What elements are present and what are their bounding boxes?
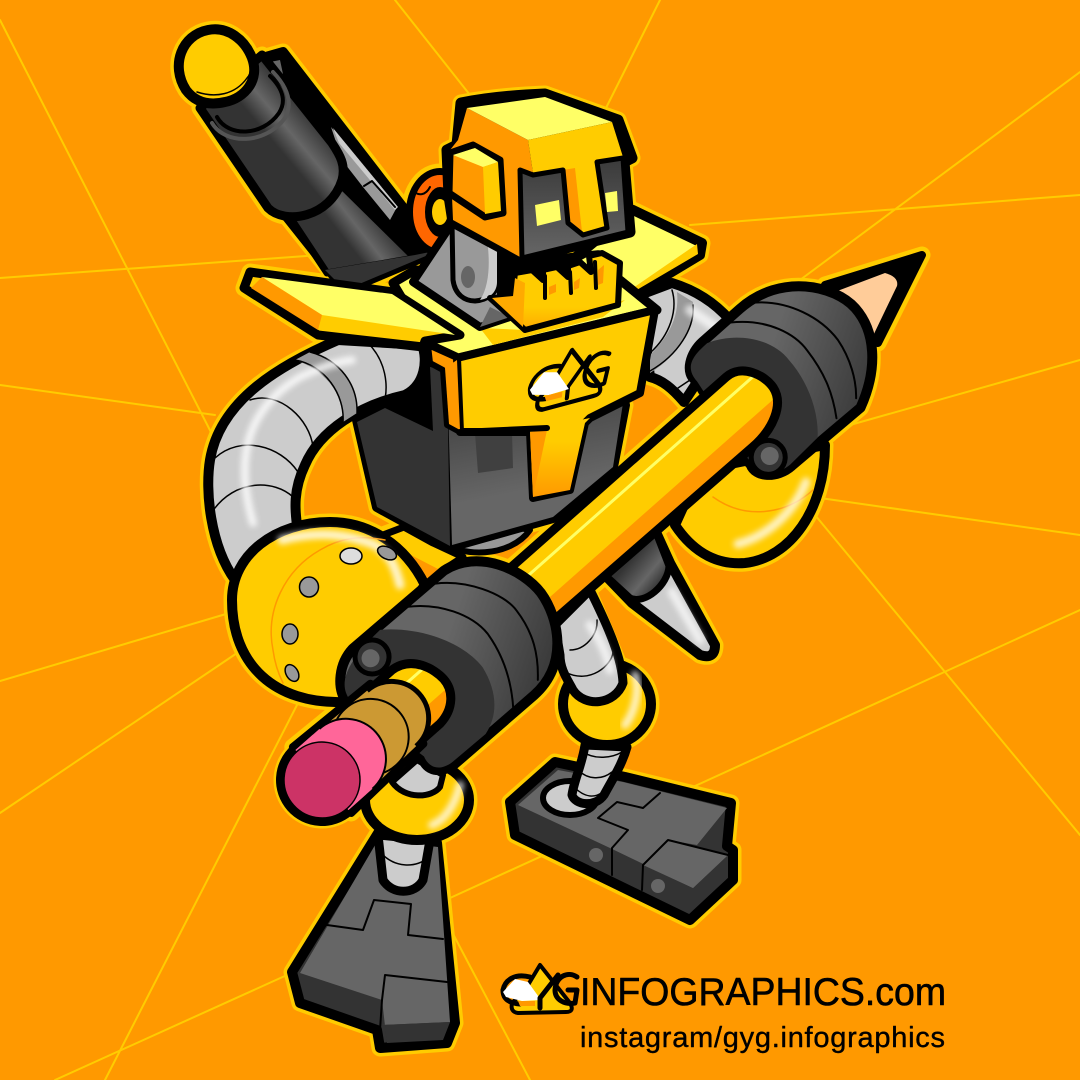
seam xyxy=(713,490,813,512)
hinge bolt xyxy=(461,266,475,288)
thin barrel xyxy=(290,187,415,273)
visor stem shade xyxy=(563,168,582,232)
head xyxy=(447,94,632,297)
head shadow on plate xyxy=(480,300,625,345)
chest top plate xyxy=(393,270,657,358)
tooth shades xyxy=(549,265,604,295)
orange ring xyxy=(406,168,474,256)
face plate xyxy=(520,158,628,258)
barrel grooves xyxy=(212,72,289,139)
right eye xyxy=(605,191,618,212)
body front face xyxy=(447,370,623,545)
left eye xyxy=(535,200,561,226)
instagram text: instagram/gyg.infographics xyxy=(580,1022,945,1054)
seam xyxy=(271,538,385,683)
pen clip plate xyxy=(210,52,440,290)
pen behind the robot xyxy=(179,29,440,290)
left foot xyxy=(292,830,455,1048)
body inset xyxy=(475,433,513,473)
eraser end face xyxy=(268,726,376,834)
jaw left shade xyxy=(492,278,525,327)
under-jaw shadow xyxy=(497,250,600,297)
stem shade xyxy=(530,430,547,497)
chest front xyxy=(457,310,655,498)
shin rings xyxy=(574,752,622,796)
ankle socket xyxy=(543,781,597,815)
right foot xyxy=(510,762,733,920)
plate corner xyxy=(265,60,283,74)
grip end face xyxy=(328,595,517,786)
footer logo xyxy=(503,965,577,1013)
chest side xyxy=(428,345,460,432)
foot seams xyxy=(598,793,728,890)
thigh rings xyxy=(565,620,613,676)
helmet front xyxy=(528,122,623,233)
right shin xyxy=(572,745,627,804)
highlight xyxy=(432,785,460,825)
ferrule xyxy=(316,665,445,791)
left knee ball xyxy=(365,760,469,840)
lower grip bolt xyxy=(348,633,396,681)
right forearm ball xyxy=(675,445,825,563)
right thigh tube xyxy=(555,590,623,702)
chest lower edge line xyxy=(460,428,547,432)
highlight xyxy=(282,535,400,585)
robot body xyxy=(357,365,625,547)
wing side xyxy=(251,277,322,330)
left shin xyxy=(378,835,430,891)
grip rings xyxy=(730,277,876,429)
lower grip xyxy=(323,531,589,791)
helmet side xyxy=(450,108,533,257)
hinge side xyxy=(480,240,497,300)
helmet top xyxy=(467,97,612,140)
arm band xyxy=(295,352,357,422)
rivets xyxy=(282,543,399,684)
hinge xyxy=(452,222,497,301)
spike joint xyxy=(605,530,669,599)
chest left shade xyxy=(445,360,460,430)
highlight xyxy=(738,482,806,544)
highlight xyxy=(625,675,637,725)
grip end face xyxy=(673,310,841,483)
pen cap edge xyxy=(197,53,251,95)
grey disc below body xyxy=(440,520,530,552)
upper grip xyxy=(668,251,907,488)
website text: INFOGRAPHICS.com xyxy=(580,971,946,1014)
right wing xyxy=(560,210,702,297)
left arm tube xyxy=(208,340,425,580)
arm band xyxy=(650,292,693,373)
arm rings xyxy=(212,343,386,512)
wood cone xyxy=(832,273,897,338)
foot top block xyxy=(643,840,728,888)
yellow pen cap xyxy=(179,29,254,103)
rear spike xyxy=(605,530,715,656)
yellow halo around the robot silhouette xyxy=(179,29,922,1048)
thigh highlight xyxy=(590,625,610,670)
left shoulder ball xyxy=(232,522,425,702)
pelvis shade xyxy=(407,553,440,582)
ear block xyxy=(449,145,503,217)
foot top face xyxy=(300,840,450,1025)
right wing edge xyxy=(630,244,698,294)
neck xyxy=(413,222,520,327)
pink eraser band xyxy=(295,729,372,810)
tooth gaps xyxy=(545,262,596,298)
foot sole shade xyxy=(382,1000,450,1043)
left thigh tube xyxy=(392,760,443,795)
neck inner xyxy=(480,307,510,327)
foot top face xyxy=(518,770,728,888)
foot seams xyxy=(327,900,447,1030)
pelvis yellow piece xyxy=(383,527,463,583)
body left face xyxy=(357,367,450,546)
arm highlight xyxy=(690,310,720,330)
chest armour xyxy=(428,310,655,498)
pencil tip xyxy=(825,255,922,343)
spike highlight xyxy=(672,592,700,640)
chest logo xyxy=(527,340,611,413)
upper grip bolt xyxy=(744,433,792,481)
pencil shaft xyxy=(508,366,782,616)
right knee ball xyxy=(563,663,651,745)
foot bolts xyxy=(589,848,665,893)
metal clip xyxy=(331,127,398,220)
chest stem gradient xyxy=(530,418,590,497)
wing top xyxy=(262,277,455,335)
arm highlight xyxy=(245,360,352,523)
left wing xyxy=(244,272,460,347)
pencil with grips xyxy=(276,281,878,826)
lower barrel dark xyxy=(325,250,440,290)
shin ring xyxy=(381,853,428,865)
pencil end section xyxy=(373,659,456,742)
grip rings xyxy=(408,554,564,717)
eraser assembly xyxy=(257,659,450,845)
arm rings xyxy=(650,290,693,388)
jaw xyxy=(490,253,620,330)
right arm tube xyxy=(640,283,730,402)
large barrel xyxy=(200,55,343,217)
